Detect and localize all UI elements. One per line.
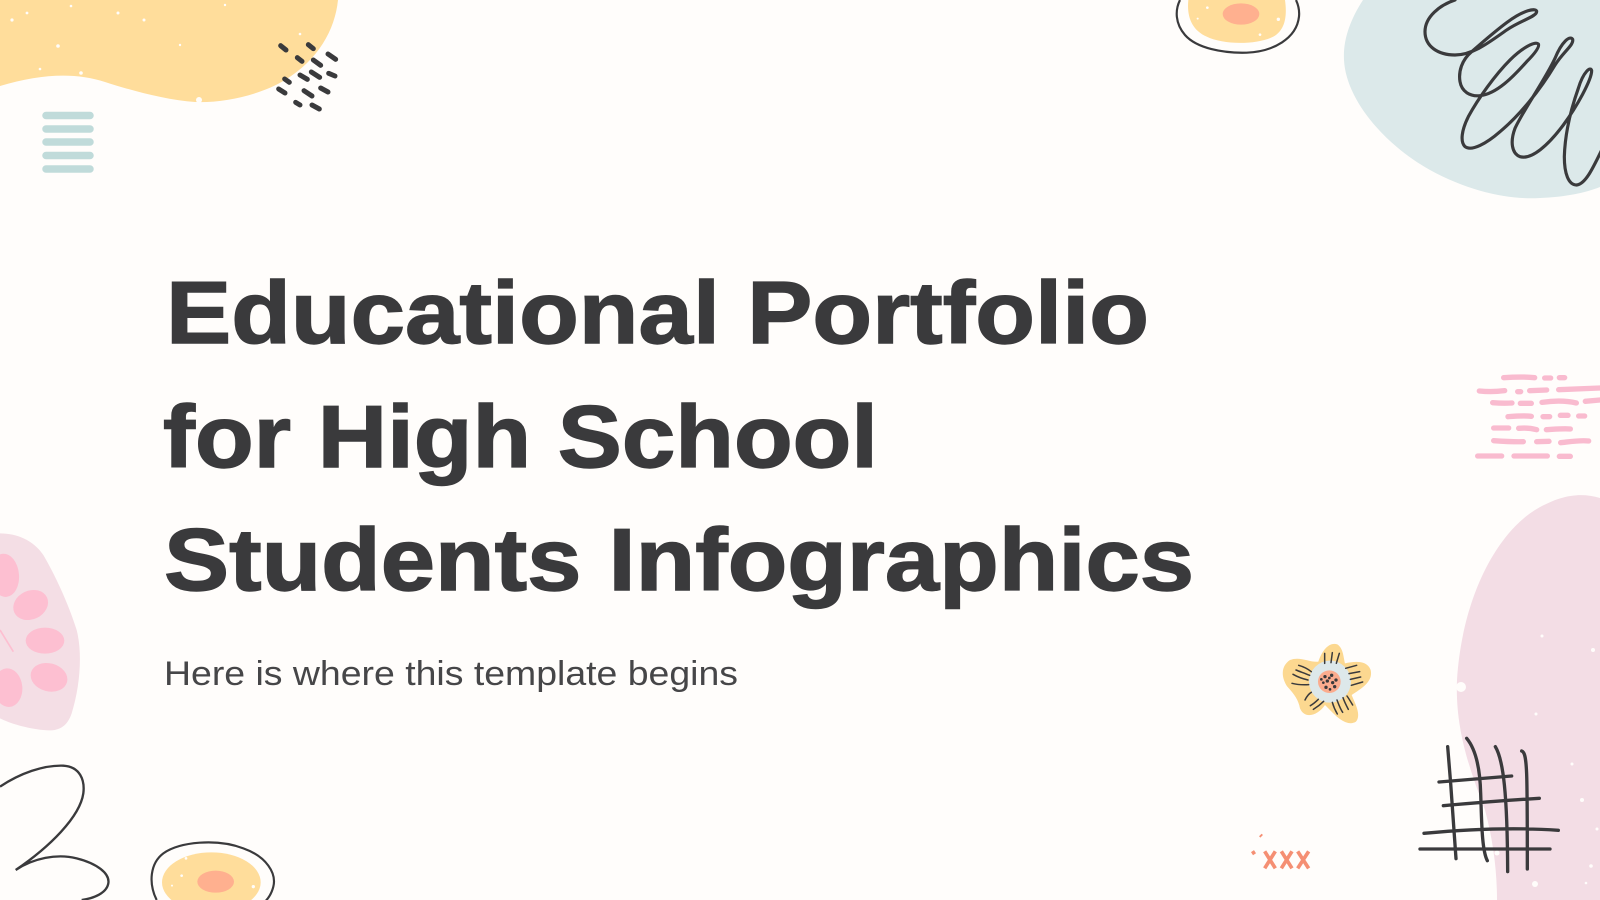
- pink dash pattern: [1478, 377, 1600, 456]
- dark dash pattern: [279, 45, 336, 109]
- title: for High School: [163, 387, 878, 486]
- title: [163, 263, 1194, 609]
- teal blob with scribble: [1344, 0, 1600, 198]
- title: Educational Portfolio: [166, 263, 1149, 362]
- line scribble bottom left: [0, 766, 108, 900]
- teal striped bars: [46, 116, 90, 169]
- title: Students Infographics: [164, 510, 1194, 609]
- pink lotus blob left: [0, 533, 80, 730]
- subtitle: Here is where this template begins: [164, 655, 738, 693]
- yellow blob top left: [0, 0, 338, 103]
- flower icon: [1283, 644, 1371, 723]
- hatch grid scribble: [1420, 738, 1558, 872]
- egg top: [1177, 0, 1299, 53]
- salmon xxx marks: [1252, 835, 1309, 868]
- egg bottom: [152, 842, 274, 900]
- pink blob right: [1456, 495, 1600, 900]
